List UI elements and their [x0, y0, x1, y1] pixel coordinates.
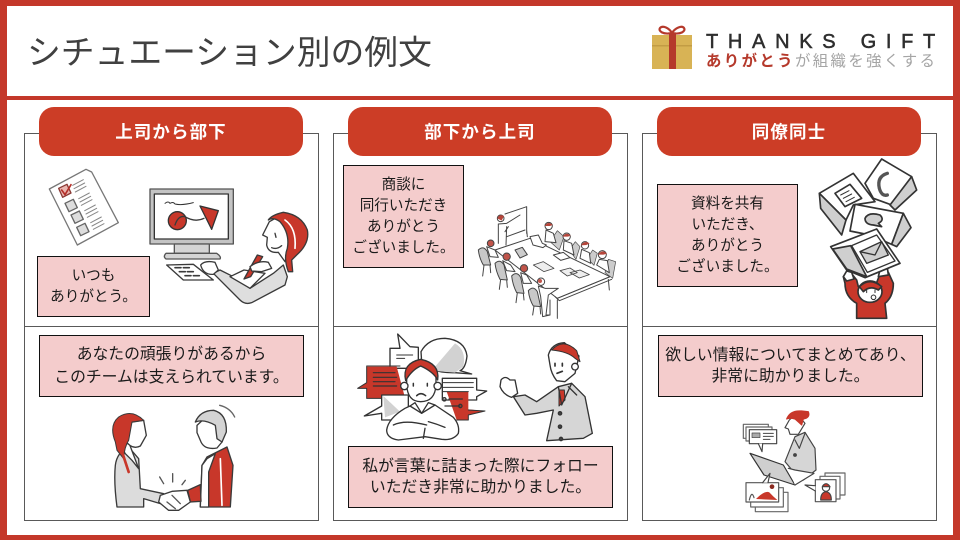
man with crossed arms: [387, 359, 459, 440]
cell: bottom: [333, 326, 628, 521]
logo wordmark: THANKS GIFT: [706, 31, 945, 53]
icon: keyboard: [167, 264, 213, 280]
message box: [39, 335, 304, 397]
cell: top: [642, 133, 937, 327]
man: [187, 405, 234, 507]
message box: 私が言葉に詰まった際にフォロー: [362, 458, 599, 475]
message box: ありがとう: [367, 219, 440, 235]
message box: いただき非常に助かりました。: [370, 479, 591, 496]
icon: gift box: [652, 26, 692, 69]
message box: [658, 335, 923, 397]
header divider: [7, 96, 953, 100]
illustration: woman with laptop: [742, 410, 846, 512]
table: [495, 235, 612, 318]
message box: [657, 184, 798, 287]
icon: monitor: [150, 189, 233, 259]
heading pill: 上司から部下: [115, 122, 227, 142]
message box: ございました。: [352, 240, 455, 256]
person: [843, 267, 893, 318]
panel: 部下から上司: [333, 107, 628, 521]
people near side with chairs: [478, 240, 558, 317]
cards: picture: [746, 473, 788, 512]
box: speech: [850, 204, 911, 247]
illustration: meeting room: [478, 206, 616, 319]
speech bubbles: [358, 334, 487, 420]
heading pill: [348, 107, 612, 156]
message box: [37, 256, 150, 317]
illustration: bubbles and two men: [357, 333, 593, 442]
message box: [348, 446, 613, 508]
hands: [158, 473, 190, 510]
message box: ございました。: [676, 259, 779, 275]
woman: [112, 413, 163, 507]
title: シチュエーション別の例文: [27, 34, 432, 72]
message box: いただき、: [692, 217, 763, 233]
panel: 上司から部下: [24, 107, 319, 521]
man in suit: [500, 343, 592, 441]
logo: THANKS GIFT: [652, 26, 945, 70]
message box: [343, 165, 464, 268]
cards: person: [805, 473, 845, 502]
heading pill: [39, 107, 303, 156]
box: document: [819, 173, 875, 235]
cell: bottom: [642, 326, 937, 521]
people far side: [545, 222, 616, 278]
illustration: checklist and woman at monitor: [48, 168, 308, 304]
message box: 商談に: [382, 177, 425, 193]
message box: 同行いただき: [360, 198, 447, 214]
heading pill: 同僚同士: [752, 122, 826, 142]
logo tagline: ありがとうが組織を強くする: [706, 53, 937, 70]
heading pill: 部下から上司: [424, 122, 536, 142]
cards: text: [743, 424, 777, 452]
icon: checklist: [49, 169, 118, 245]
message box: あなたの頑張りがあるから: [77, 346, 266, 363]
illustration: handshake: [112, 404, 236, 511]
whiteboard and presenter: [497, 207, 527, 245]
message box: いつも: [72, 268, 115, 284]
cell: bottom: [24, 326, 319, 521]
cell: top: [333, 133, 628, 327]
message box: 資料を共有: [691, 196, 764, 212]
illustration: person lifting boxes: [818, 158, 918, 320]
heading pill: [657, 107, 921, 156]
box: mail: [831, 229, 900, 278]
cell: top: [24, 133, 319, 327]
message box: 欲しい情報についてまとめてあり、: [665, 347, 916, 364]
box: phone: [865, 159, 917, 210]
panel: 同僚同士: [642, 107, 937, 521]
woman drawing: [201, 212, 308, 303]
message box: ありがとう。: [50, 289, 137, 305]
message box: 非常に助かりました。: [712, 368, 869, 385]
message box: このチームは支えられています。: [54, 369, 289, 386]
message box: ありがとう: [691, 238, 764, 254]
woman: [785, 411, 816, 480]
laptop: [750, 453, 814, 485]
